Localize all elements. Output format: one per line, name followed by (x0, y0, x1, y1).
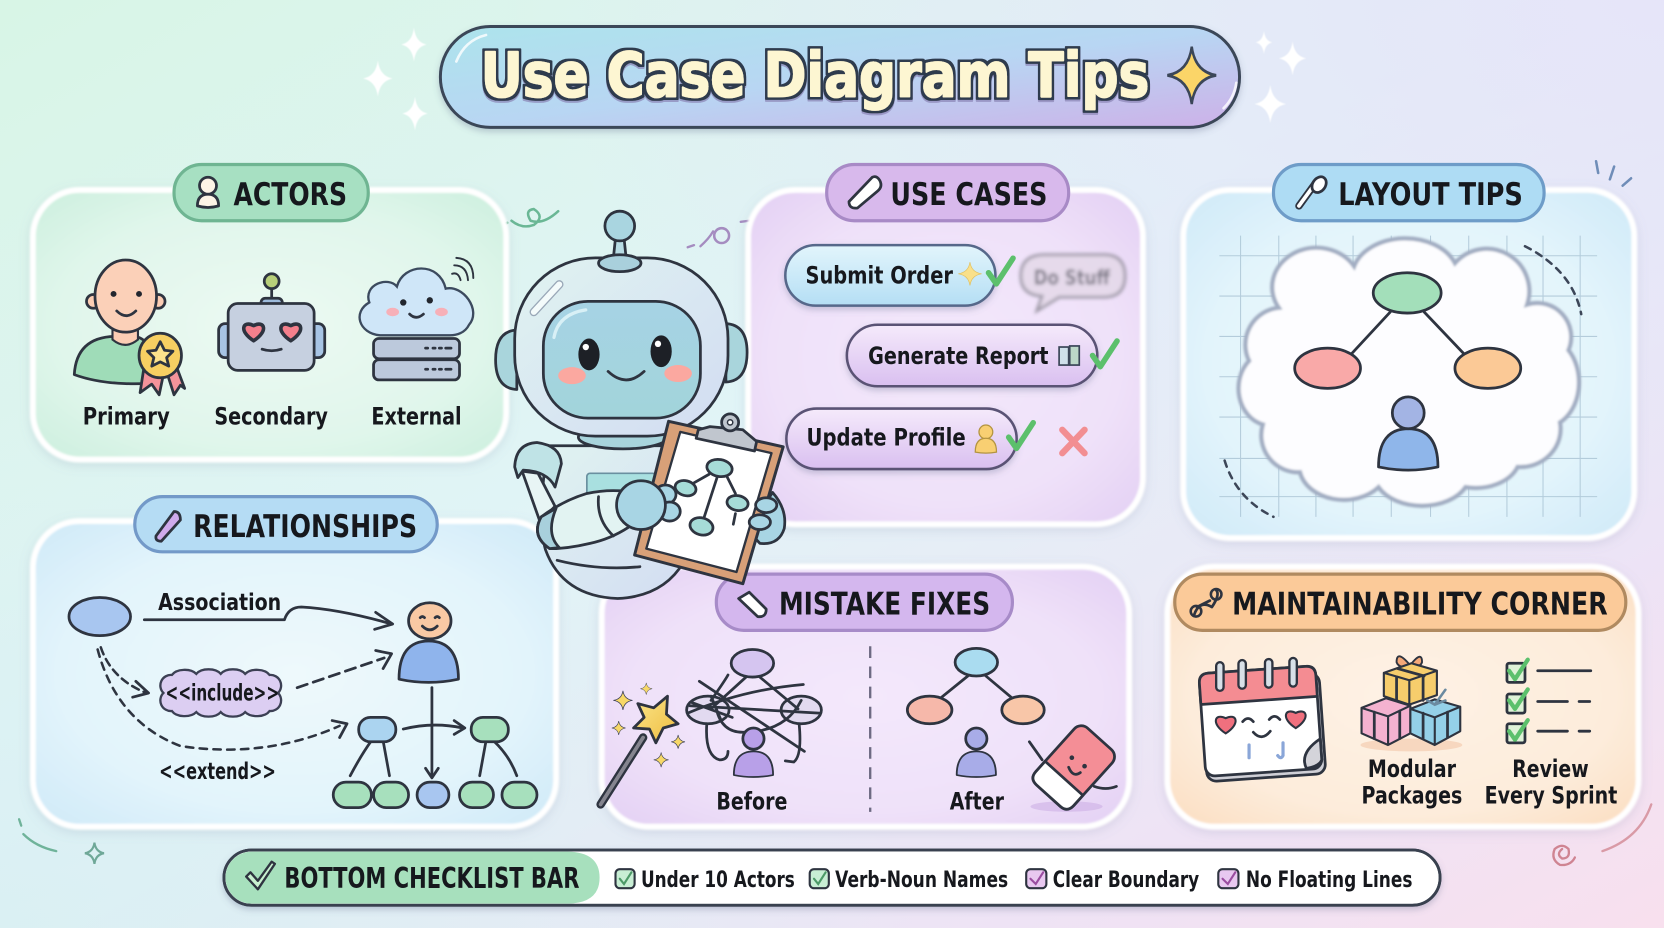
before: tangled diagram (687, 649, 821, 816)
icon: primary actor (74, 260, 185, 395)
check item: clear boundary: Clear Boundary (1053, 867, 1200, 893)
heading: maintainability corner (1175, 574, 1626, 630)
icon: sprint checklist (1507, 660, 1591, 743)
use case tree (1295, 273, 1521, 388)
check item: under 10 actors (616, 867, 795, 893)
right hand back (748, 492, 785, 544)
check item: verb-noun names: Verb-Noun Names (835, 867, 1008, 893)
antenna (599, 211, 641, 272)
panel: maintainability corner (1167, 567, 1639, 827)
right fingers (749, 498, 777, 530)
robot ears (496, 330, 517, 389)
check item: no floating lines: No Floating Lines (1246, 867, 1412, 893)
title banner (440, 27, 1240, 127)
heading: mistake fixes (716, 574, 1012, 630)
label: modular packages (1362, 755, 1462, 809)
icon: smiling calendar (1199, 658, 1326, 782)
icon: smiling eraser (1029, 722, 1118, 813)
label: review every sprint: Every Sprint (1485, 781, 1617, 809)
clipboard (635, 414, 783, 584)
panel: use cases (748, 164, 1143, 524)
panel: actors (33, 164, 506, 460)
callout: do stuff (blurred) (1021, 255, 1125, 311)
icon: magic wand (601, 683, 685, 804)
include relation (101, 647, 392, 717)
use case: submit order: Submit Order (805, 261, 953, 289)
panel: relationships (33, 497, 556, 827)
label: modular packages: Modular (1368, 755, 1456, 783)
heading: use cases: USE CASES (890, 177, 1047, 213)
heading: relationships: RELATIONSHIPS (193, 509, 417, 545)
use case: update profile: Update Profile (807, 424, 966, 452)
check item: no floating lines (1218, 867, 1412, 893)
helmet highlight (534, 284, 559, 312)
mascot robot with clipboard (496, 211, 785, 599)
extend relation (98, 649, 347, 785)
use case: generate report (847, 325, 1117, 386)
include relation: <<include>> (166, 680, 279, 706)
forearm and hand (537, 481, 680, 549)
actor (1379, 397, 1438, 470)
icon: modular gift packages (1360, 656, 1462, 751)
label: review every sprint: Review (1512, 755, 1589, 783)
label: secondary: Secondary (214, 402, 328, 430)
label: review every sprint (1485, 755, 1617, 809)
icon: red cross (1062, 430, 1085, 453)
callout: do stuff (blurred): Do Stuff (1034, 265, 1111, 289)
robot head (515, 258, 728, 436)
heading: mistake fixes: MISTAKE FIXES (779, 586, 990, 622)
heading: layout tips (1273, 164, 1544, 221)
extend relation: <<extend>> (159, 759, 276, 785)
robot face (558, 335, 692, 384)
icon: checklist tick (246, 862, 275, 889)
use case: submit order (785, 245, 1013, 306)
association relation (69, 590, 393, 636)
title text: Use Case Diagram Tips (481, 40, 1149, 112)
actor with smile (399, 603, 458, 682)
visor (543, 301, 700, 418)
before: tangled diagram: Before (716, 788, 787, 816)
after: clean diagram: After (950, 788, 1004, 816)
association relation: Association (158, 590, 281, 616)
heading: use cases (827, 164, 1069, 221)
node hierarchy (333, 688, 537, 808)
left arm (515, 443, 561, 522)
check item: under 10 actors: Under 10 Actors (641, 867, 795, 893)
after: clean diagram (907, 648, 1044, 816)
icon: gold sparkle (1167, 47, 1216, 104)
robot body (542, 446, 700, 599)
use case: generate report: Generate Report (868, 342, 1048, 370)
label: modular packages: Packages (1362, 781, 1462, 809)
icon: secondary robot (219, 274, 325, 370)
bar title: BOTTOM CHECKLIST BAR (284, 861, 579, 895)
dashed boundary arcs (1525, 246, 1581, 314)
icon: external cloud server (360, 258, 473, 380)
heading: layout tips: LAYOUT TIPS (1338, 177, 1523, 213)
grid (1219, 236, 1597, 517)
divider (869, 646, 871, 812)
bottom checklist bar (224, 850, 1440, 905)
heading: actors: ACTORS (233, 177, 347, 213)
panel: layout tips (1183, 164, 1634, 538)
panel: mistake fixes (601, 567, 1129, 827)
label: external: External (371, 402, 462, 430)
label: primary: Primary (83, 402, 170, 430)
cloud boundary (1239, 238, 1579, 506)
check item: verb-noun names (810, 867, 1008, 893)
use case: update profile (786, 409, 1033, 469)
heading: relationships (135, 497, 437, 552)
heading: actors (174, 164, 368, 221)
check item: clear boundary (1026, 867, 1200, 893)
